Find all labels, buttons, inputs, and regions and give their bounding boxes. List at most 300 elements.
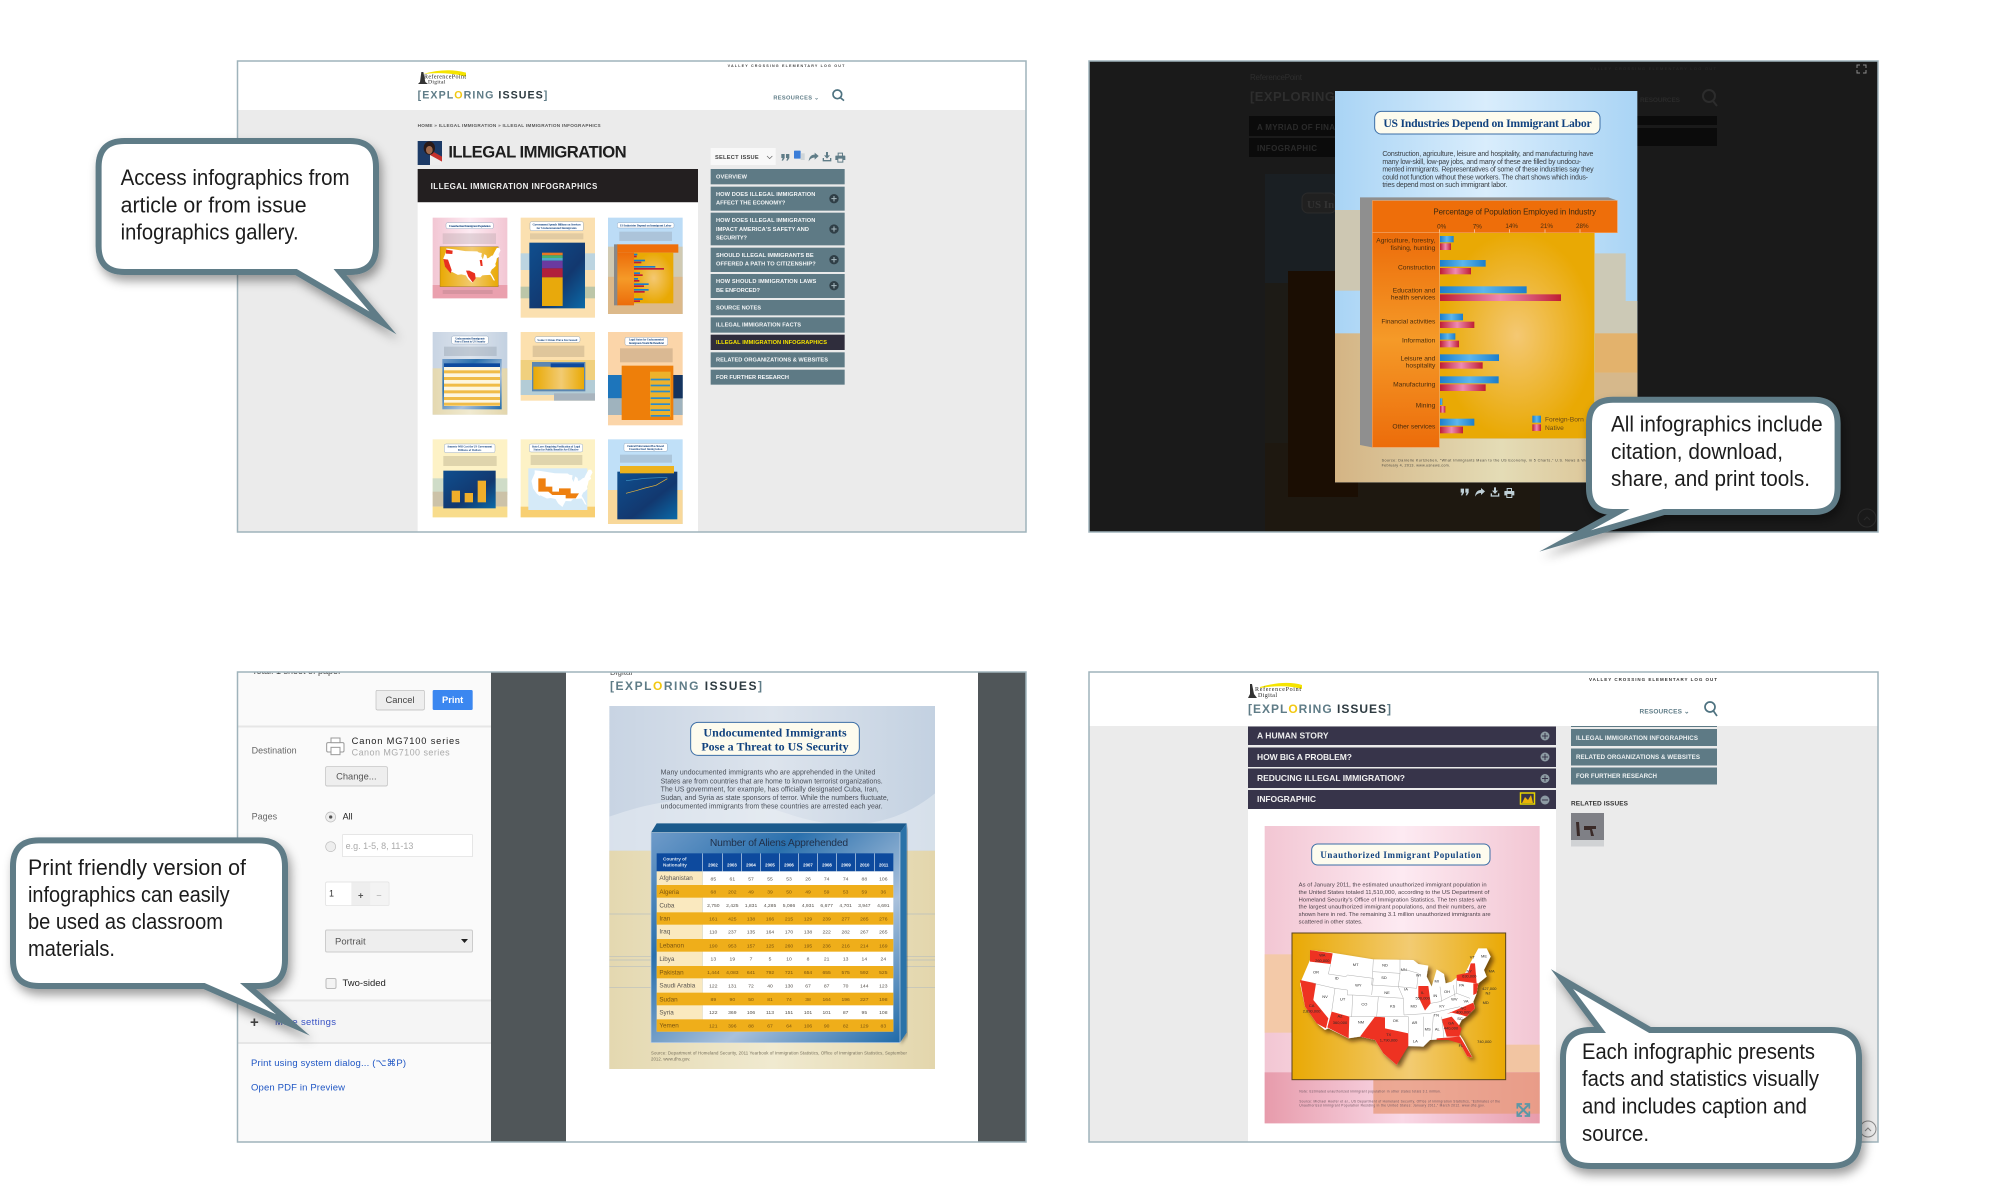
map state labels: ND xyxy=(1382,963,1388,968)
callout: facts and statistics: Each infographic presents xyxy=(1582,1039,1815,1064)
table: number of aliens apprehended: 2008 xyxy=(822,863,832,868)
table: number of aliens apprehended: 57 xyxy=(748,876,754,882)
table: number of aliens apprehended: 106 xyxy=(804,1023,812,1029)
ghost page behind lightbox: [EXPLORING xyxy=(1250,89,1335,104)
table: number of aliens apprehended: Iran xyxy=(659,916,671,923)
callout: access infographics: article or from issue xyxy=(121,192,307,218)
panel: article table of contents xyxy=(711,169,845,385)
table: number of aliens apprehended: 10 xyxy=(786,957,792,963)
thumbnail: State Laws Requiring Verification xyxy=(521,439,595,517)
print preview pane: Digital xyxy=(610,668,632,677)
table: number of aliens apprehended: 61 xyxy=(730,876,735,882)
text: intro paragraph: tries depend most on such immigrant labor. xyxy=(1382,182,1507,189)
table: number of aliens apprehended: 40 xyxy=(767,983,773,989)
map state labels: TX xyxy=(1386,1032,1392,1037)
panel border 1 xyxy=(238,61,1026,532)
panel: select issue and tools xyxy=(711,148,845,165)
table: number of aliens apprehended: 1,831 xyxy=(745,903,757,909)
table: number of aliens apprehended: 121 xyxy=(709,1023,718,1029)
panel: article table of contents: ILLEGAL IMMIGRATION INFOGRAPHICS xyxy=(716,340,827,346)
table: number of aliens apprehended: 216 xyxy=(842,943,850,949)
map state labels xyxy=(1303,953,1497,1048)
table: number of aliens apprehended: 4,931 xyxy=(802,903,814,909)
map state labels: NJ xyxy=(1486,990,1490,995)
map state labels: 260,000 xyxy=(1315,958,1330,963)
callout: citation and tools xyxy=(1565,400,1838,541)
table: number of aliens apprehended: 70 xyxy=(843,983,849,989)
callout: access infographics: Access infographics from xyxy=(121,165,350,190)
callout: citation and tools: share, and print tools. xyxy=(1611,466,1810,491)
ghost page behind lightbox: RESOURCES xyxy=(1640,97,1681,104)
table: number of aliens apprehended: Yemen xyxy=(659,1022,679,1029)
map state borders xyxy=(1313,959,1470,1040)
map state labels: IN xyxy=(1433,993,1437,998)
table: number of aliens apprehended: 131 xyxy=(728,983,737,989)
map state labels: UT xyxy=(1340,996,1346,1001)
map state labels: 360,000 xyxy=(1333,1020,1348,1025)
ghost page behind lightbox: US In xyxy=(1307,199,1334,211)
text: note and source: Note: Estimated unauthorized immigrant population in other states totals 3.1 million. xyxy=(1299,1090,1441,1094)
map state labels: IA xyxy=(1404,986,1408,991)
panel: print dialog screenshot xyxy=(238,666,1026,1142)
map state labels: FL xyxy=(1459,1043,1464,1048)
callout: citation and tools: citation, download, xyxy=(1611,439,1783,464)
table: number of aliens apprehended: 67 xyxy=(805,983,811,989)
text: breadcrumb: HOME » ILLEGAL IMMIGRATION » ILLEGAL IMMIGRATION INFOGRAPHICS xyxy=(418,123,601,128)
callout: print friendly: be used as classroom xyxy=(28,909,223,934)
title box xyxy=(1375,111,1600,134)
callout: access infographics xyxy=(99,141,383,323)
bar chart: employment by industry: Information xyxy=(1402,338,1436,345)
table: number of aliens apprehended: 267 xyxy=(860,930,869,936)
form: copies: − xyxy=(376,890,382,900)
accordion: article sections: A HUMAN STORY xyxy=(1257,730,1329,740)
table: number of aliens apprehended: 953 xyxy=(728,943,737,949)
panel: article table of contents: RELATED ORGANIZATIONS & WEBSITES xyxy=(716,358,828,364)
panel: article table of contents: HOW SHOULD IMMIGRATION LAWS xyxy=(716,279,817,285)
text: intro paragraph: Construction, agriculture, leisure and hospitality, and manufacturing have xyxy=(1382,151,1593,158)
table: number of aliens apprehended: 215 xyxy=(785,916,793,922)
table: number of aliens apprehended: 265 xyxy=(879,930,888,936)
thumbnail: Some Crimes xyxy=(521,332,595,401)
map state labels: 427,000 xyxy=(1482,986,1497,991)
table: number of aliens apprehended: 227 xyxy=(860,997,869,1003)
table: number of aliens apprehended: 2009 xyxy=(841,863,851,868)
table: number of aliens apprehended: 72 xyxy=(748,983,754,989)
map state labels: GA xyxy=(1448,1021,1454,1026)
table: number of aliens apprehended: 21 xyxy=(824,957,830,963)
table: number of aliens apprehended: 214 xyxy=(860,943,869,949)
table: number of aliens apprehended: 196 xyxy=(842,997,850,1003)
thumbnail: Legal Status xyxy=(608,332,683,425)
form: destination: Canon MG7100 series xyxy=(352,736,460,746)
table: number of aliens apprehended: Sudan xyxy=(659,997,678,1004)
sidebar: article links: ILLEGAL IMMIGRATION INFOGRAPHICS xyxy=(1576,735,1698,742)
map state labels: 440,000 xyxy=(1444,1025,1459,1030)
text: intro paragraph xyxy=(661,770,889,810)
text: note and source: Source: Michael Hoefer et al., US Department of Homeland Security, Office of Immigration Statistics, "Estimates of the xyxy=(1299,1099,1500,1103)
table: number of aliens apprehended: 6,677 xyxy=(820,903,833,909)
table: number of aliens apprehended: 2002 xyxy=(708,863,718,868)
bar chart: employment by industry: 21% xyxy=(1540,223,1553,230)
logo: ReferencePoint Digital xyxy=(1248,683,1302,699)
icon: scroll to top xyxy=(1860,1121,1876,1137)
button: Cancel xyxy=(376,690,424,710)
bar chart: employment by industry: 0% xyxy=(1437,223,1447,230)
text: intro paragraph: could not function without these workers. The chart shows which indus- xyxy=(1382,174,1589,181)
map state labels: MS xyxy=(1425,1027,1431,1032)
text: intro paragraph: the largest unauthorized immigrant populations, and their numbers, are xyxy=(1299,905,1486,911)
panel: article table of contents: IMPACT AMERICA'S SAFETY AND xyxy=(716,227,809,233)
table: number of aliens apprehended: 2010 xyxy=(860,863,870,868)
bar chart: employment by industry: Mining xyxy=(1416,402,1436,409)
map state labels: NY xyxy=(1467,969,1472,974)
text: resources menu: RESOURCES ⌄ xyxy=(773,95,819,101)
ghost page behind lightbox: A MYRIAD OF FINA xyxy=(1257,123,1335,132)
map state labels: KS xyxy=(1390,1003,1396,1008)
table: number of aliens apprehended: 525 xyxy=(879,970,888,976)
table: number of aliens apprehended: 2006 xyxy=(784,863,794,868)
table: number of aliens apprehended: Lebanon xyxy=(659,943,684,950)
table: number of aliens apprehended: 7 xyxy=(750,957,753,963)
panel: article table of contents: BE ENFORCED? xyxy=(716,288,761,294)
infographic: Unauthorized Immigrant Population xyxy=(1265,826,1540,1123)
map: US unauthorized population xyxy=(1292,933,1506,1080)
thumbnail: Undocumented Immigrants Pose a Threat: Undocumented Immigrants xyxy=(455,337,485,340)
icon: infographic chart xyxy=(1520,793,1534,804)
panel border 4 xyxy=(1089,672,1878,1142)
link: more settings xyxy=(250,1014,336,1031)
text: intro paragraph: Sudan, and Syria as state sponsors of terror. While the numbers fluctuate, xyxy=(661,795,889,802)
sidebar: related issues xyxy=(1571,800,1629,846)
panel: article table of contents: HOW DOES ILLEGAL IMMIGRATION xyxy=(716,192,815,198)
bar chart: employment by industry: health services xyxy=(1391,295,1436,302)
table: number of aliens apprehended: Country of xyxy=(663,856,687,861)
ghost page behind lightbox: ReferencePoint xyxy=(1250,73,1303,82)
print preview pane xyxy=(491,668,1026,1142)
bar chart: employment by industry: Education and xyxy=(1393,288,1436,295)
table: number of aliens apprehended: Cuba xyxy=(659,902,675,909)
title box: Unauthorized Immigrant Population xyxy=(1320,850,1481,860)
table: number of aliens apprehended: 425 xyxy=(728,916,737,922)
table: number of aliens apprehended: 106 xyxy=(747,1010,755,1016)
ghost page behind lightbox: INFOGRAPHIC xyxy=(1257,144,1317,153)
table: number of aliens apprehended: 50 xyxy=(786,890,792,896)
thumbnail: Amnesty Will Cost: Billions of Dollars xyxy=(458,449,481,452)
thumbnail: Unauthorized Immigrant Population xyxy=(433,218,507,298)
table: number of aliens apprehended: 67 xyxy=(767,1023,773,1029)
map state labels: TN xyxy=(1434,1013,1439,1018)
table: number of aliens apprehended: 39 xyxy=(767,890,773,896)
table: number of aliens apprehended: 123 xyxy=(879,983,888,989)
table: number of aliens apprehended: 276 xyxy=(879,916,888,922)
table: number of aliens apprehended: 90 xyxy=(730,997,735,1003)
table: number of aliens apprehended: 161 xyxy=(709,916,718,922)
table: number of aliens apprehended: 4,083 xyxy=(726,970,739,976)
table: number of aliens apprehended: 125 xyxy=(766,943,774,949)
map state labels: OH xyxy=(1444,989,1450,994)
accordion: article sections: INFOGRAPHIC xyxy=(1257,794,1316,804)
map state labels: OR xyxy=(1313,969,1319,974)
text: intro paragraph: the United States totaled 11,510,000, according to the US Department of xyxy=(1299,890,1490,896)
title box xyxy=(691,722,859,755)
table: number of aliens apprehended: 151 xyxy=(785,1010,793,1016)
text: intro paragraph xyxy=(1299,883,1491,925)
bar chart: employment by industry: hospitality xyxy=(1406,363,1436,370)
heading: Exploring Issues wordmark: [EXPLORING ISSUES] xyxy=(610,679,762,693)
table: number of aliens apprehended: 13 xyxy=(711,957,716,963)
text: note and source xyxy=(1299,1090,1500,1108)
table: number of aliens apprehended: 36 xyxy=(881,890,886,896)
table: number of aliens apprehended: 14 xyxy=(862,957,867,963)
form: destination xyxy=(252,736,460,786)
form: destination: Canon MG7100 series xyxy=(352,748,450,758)
bar chart: employment by industry xyxy=(1360,197,1618,447)
callout: print friendly: Print friendly version of xyxy=(28,855,247,880)
table: number of aliens apprehended: 285 xyxy=(860,916,869,922)
thumbnail: Unauthorized Immigrant Population: Unauthorized Immigrant Population xyxy=(449,224,491,228)
map state labels: 630,000 xyxy=(1462,973,1477,978)
table: number of aliens apprehended: 277 xyxy=(842,916,850,922)
thumbnail: Federal Enforcement xyxy=(608,439,683,524)
logo: ReferencePoint Digital: Digital xyxy=(428,80,446,86)
links: system dialog and preview: Open PDF in Preview xyxy=(251,1082,345,1094)
table: number of aliens apprehended: 50 xyxy=(748,997,754,1003)
chart legend: Foreign-Born xyxy=(1545,416,1584,423)
form: destination: Destination xyxy=(252,746,297,756)
table: number of aliens apprehended: 4,285 xyxy=(764,903,776,909)
form: destination: Change... xyxy=(336,771,377,781)
table: number of aliens apprehended: 82 xyxy=(843,1023,849,1029)
thumbnail: State Laws Requiring Verification: State Laws Requiring Verification of Legal xyxy=(532,446,580,449)
table: number of aliens apprehended: 135 xyxy=(747,930,755,936)
table: number of aliens apprehended: 239 xyxy=(823,916,831,922)
panel: article infographic screenshot xyxy=(1089,672,1878,1142)
table: number of aliens apprehended: 130 xyxy=(785,983,793,989)
map state labels: 2,830,000 xyxy=(1303,1008,1321,1013)
bar chart: employment by industry: Agriculture, forestry, xyxy=(1376,238,1435,245)
link: more settings: + xyxy=(250,1014,259,1031)
map state labels: ID xyxy=(1335,976,1339,981)
accordion: article sections: HOW BIG A PROBLEM? xyxy=(1257,752,1352,762)
text: source: Source: Danielle Kurtzleben, "What Immigrants Mean to the US Economy, in 5 Charts," U.S. News & World Report, xyxy=(1382,458,1608,462)
sidebar: article links xyxy=(1571,726,1717,784)
thumbnail: State Laws Requiring Verification: Status for Public Benefits Are Effective xyxy=(533,449,579,452)
logo: ReferencePoint Digital: Digital xyxy=(1258,693,1277,699)
icon: search xyxy=(1705,702,1717,716)
form: two-sided: Two-sided xyxy=(342,978,386,989)
thumbnail: Some Crimes: Some Crimes Have Increased xyxy=(537,338,578,342)
table: number of aliens apprehended: 74 xyxy=(824,876,830,882)
map state labels: MI xyxy=(1434,978,1439,983)
table: number of aliens apprehended: 592 xyxy=(860,970,869,976)
title box: US Industries Depend on Immigrant Labor xyxy=(1383,117,1592,130)
thumbnail: US Industries Depend on Immigrant Labor: US Industries Depend on Immigrant Labor xyxy=(620,224,672,228)
callout: print friendly: infographics can easily xyxy=(28,882,230,907)
table: number of aliens apprehended: Syria xyxy=(659,1009,674,1016)
bar chart: employment by industry: Manufacturing xyxy=(1393,381,1436,388)
map state labels: AZ xyxy=(1337,1014,1343,1019)
table: number of aliens apprehended: 95 xyxy=(862,1010,867,1016)
sidebar: article links: RELATED ORGANIZATIONS & WEBSITES xyxy=(1576,754,1700,761)
table: number of aliens apprehended: 4,691 xyxy=(877,903,890,909)
table: number of aliens apprehended: Saudi Arabia xyxy=(659,983,696,990)
table: number of aliens apprehended: 68 xyxy=(711,890,716,896)
callout: facts and statistics: source. xyxy=(1582,1121,1649,1146)
map state labels: KY xyxy=(1439,1003,1445,1008)
panel: article table of contents: ILLEGAL IMMIGRATION FACTS xyxy=(716,323,801,329)
ghost page behind lightbox xyxy=(1249,66,1717,532)
panel: article table of contents: FOR FURTHER RESEARCH xyxy=(716,375,789,381)
table: number of aliens apprehended: 260 xyxy=(785,943,793,949)
panel: issue infographics gallery screenshot xyxy=(238,61,1026,532)
table: number of aliens apprehended: 2007 xyxy=(803,863,813,868)
panel: article table of contents: AFFECT THE ECONOMY? xyxy=(716,201,786,207)
table: number of aliens apprehended: 59 xyxy=(862,890,867,896)
text: intro paragraph: many low-skill, low-pay jobs, and many of these are filled by undocu- xyxy=(1382,159,1582,166)
logo: ReferencePoint Digital xyxy=(418,70,466,86)
text: intro paragraph: shown here in red. The remaining 3.1 million unauthorized immigrants are xyxy=(1299,912,1491,918)
map state labels: OK xyxy=(1393,1018,1399,1023)
thumbnail: Legal Status: Legal Status for Undocumented xyxy=(629,339,664,342)
table: number of aliens apprehended: 122 xyxy=(709,1010,718,1016)
table: number of aliens apprehended: 195 xyxy=(804,943,812,949)
table: number of aliens apprehended: 198 xyxy=(879,997,888,1003)
table: number of aliens apprehended: 282 xyxy=(842,930,850,936)
map state labels: WY xyxy=(1355,982,1362,987)
map state labels: 550,000 xyxy=(1415,995,1431,1000)
panel border 2 xyxy=(1089,61,1878,532)
text: intro paragraph: undocumented immigrants from these countries are arrested each year. xyxy=(661,803,883,810)
callout: print friendly xyxy=(13,840,293,1025)
button: Print: Print xyxy=(442,695,463,705)
map state labels: ME xyxy=(1481,953,1487,958)
table: number of aliens apprehended: 236 xyxy=(823,943,831,949)
title box: Pose a Threat to US Security xyxy=(701,740,849,754)
bar chart: employment by industry: 28% xyxy=(1576,223,1589,230)
table: number of aliens apprehended: 129 xyxy=(804,916,812,922)
table: number of aliens apprehended: 26 xyxy=(805,876,811,882)
table: number of aliens apprehended: 74 xyxy=(843,876,849,882)
thumbnail: Undocumented Immigrants Pose a Threat: Pose a Threat to US Security xyxy=(455,341,486,344)
map state labels: SD xyxy=(1381,975,1387,980)
table: number of aliens apprehended: Pakistan xyxy=(659,970,684,977)
callout: facts and statistics: and includes caption and xyxy=(1582,1094,1807,1118)
table: number of aliens apprehended: 74 xyxy=(786,997,792,1003)
table: number of aliens apprehended: 157 xyxy=(747,943,755,949)
table: number of aliens apprehended: Nationality xyxy=(663,863,687,868)
table: number of aliens apprehended: 396 xyxy=(728,1023,737,1029)
table: number of aliens apprehended: 49 xyxy=(805,890,811,896)
map state labels: VA xyxy=(1463,998,1469,1003)
table: number of aliens apprehended: 122 xyxy=(709,983,718,989)
table: number of aliens apprehended: 144 xyxy=(860,983,869,989)
form: copies xyxy=(326,882,389,906)
table: number of aliens apprehended: 90 xyxy=(824,1023,830,1029)
thumbnail: Legal Status: Immigrants Would Be Beneficial xyxy=(629,342,664,345)
thumbnail: Government Spends Billions: Government Spends Billions on Services xyxy=(532,223,582,227)
table: number of aliens apprehended: 2,425 xyxy=(726,903,739,909)
text: source: 2012. www.dhs.gov. xyxy=(651,1056,690,1061)
table: number of aliens apprehended: 89 xyxy=(711,997,716,1003)
table: number of aliens apprehended: 87 xyxy=(824,983,830,989)
table: number of aliens apprehended: 81 xyxy=(767,997,773,1003)
table: number of aliens apprehended: 19 xyxy=(730,957,735,963)
map state labels: LA xyxy=(1413,1039,1418,1044)
form: pages: All xyxy=(343,812,353,822)
table: number of aliens apprehended: 1,444 xyxy=(707,970,720,976)
table: number of aliens apprehended: 53 xyxy=(786,876,792,882)
table: number of aliens apprehended: 5,086 xyxy=(783,903,795,909)
map state labels: NV xyxy=(1322,994,1328,999)
table: number of aliens apprehended: 113 xyxy=(766,1010,774,1016)
panel: article table of contents: SHOULD ILLEGAL IMMIGRANTS BE xyxy=(716,253,814,259)
heading: Exploring Issues wordmark: [EXPLORING ISSUES] xyxy=(1248,702,1391,716)
bar chart: employment by industry: fishing, hunting xyxy=(1391,245,1436,252)
panel: article table of contents: OFFERED A PATH TO CITIZENSHIP? xyxy=(716,262,816,268)
map state labels: SC xyxy=(1457,1016,1463,1021)
table: number of aliens apprehended: 164 xyxy=(823,997,831,1003)
table: number of aliens apprehended: 655 xyxy=(823,970,831,976)
bar chart: employment by industry: 7% xyxy=(1473,223,1482,230)
table: number of aliens apprehended: 49 xyxy=(748,890,754,896)
table: number of aliens apprehended: 138 xyxy=(804,930,812,936)
text: intro paragraph xyxy=(1382,151,1594,189)
table: number of aliens apprehended: 721 xyxy=(785,970,793,976)
panel border 3 xyxy=(238,672,1026,1142)
table: number of aliens apprehended: 2011 xyxy=(879,863,889,868)
table: number of aliens apprehended: 237 xyxy=(728,930,737,936)
map state labels: 740,000 xyxy=(1477,1039,1492,1044)
chart legend: Native xyxy=(1545,425,1564,432)
bar chart: employment by industry: Construction xyxy=(1398,264,1436,271)
bar chart: employment by industry: Financial activities xyxy=(1381,318,1436,325)
table: number of aliens apprehended: 164 xyxy=(766,930,774,936)
bar chart: employment by industry: Other services xyxy=(1392,423,1436,430)
form: copies: + xyxy=(358,890,364,900)
text: intro paragraph: mented immigrants. Representatives of some of these industries say they xyxy=(1382,167,1594,174)
text: intro paragraph: Many undocumented immigrants who are apprehended in the United xyxy=(661,770,875,777)
form: copies: 1 xyxy=(329,889,334,899)
sidebar: article links: FOR FURTHER RESEARCH xyxy=(1576,773,1658,780)
table: number of aliens apprehended: 202 xyxy=(728,890,737,896)
table: number of aliens apprehended: 129 xyxy=(860,1023,869,1029)
table: number of aliens apprehended: 53 xyxy=(843,890,849,896)
map state labels: AR xyxy=(1412,1020,1418,1025)
thumbnail: Federal Enforcement: Unauthorized Immigration xyxy=(629,448,663,451)
table: number of aliens apprehended: 2,750 xyxy=(707,903,720,909)
table: number of aliens apprehended: 2005 xyxy=(765,863,775,868)
thumbnail: Undocumented Immigrants Pose a Threat xyxy=(433,332,507,415)
ghost page behind lightbox: VALLEY CROSSING ELEMENTARY LOG OUT xyxy=(1590,66,1717,71)
button: Cancel: Cancel xyxy=(385,695,415,705)
table: number of aliens apprehended: 106 xyxy=(879,876,888,882)
panel: article table of contents: OVERVIEW xyxy=(716,175,748,181)
bar chart: employment by industry: 14% xyxy=(1505,223,1518,230)
icon: scroll to top xyxy=(1858,509,1876,527)
map state labels: NE xyxy=(1384,990,1390,995)
title box: Undocumented Immigrants xyxy=(703,726,847,740)
callout: citation and tools: All infographics include xyxy=(1611,412,1823,437)
map state labels: 1,790,000 xyxy=(1380,1037,1398,1042)
map state labels: NM xyxy=(1358,1020,1364,1025)
icon: expand arrows xyxy=(1517,1104,1529,1116)
map state labels: VT xyxy=(1470,955,1475,960)
text: intro paragraph: scattered in other states. xyxy=(1299,919,1363,925)
table: number of aliens apprehended: 55 xyxy=(767,876,773,882)
map state labels: MT xyxy=(1353,962,1359,967)
map state labels: NC xyxy=(1460,1006,1466,1011)
